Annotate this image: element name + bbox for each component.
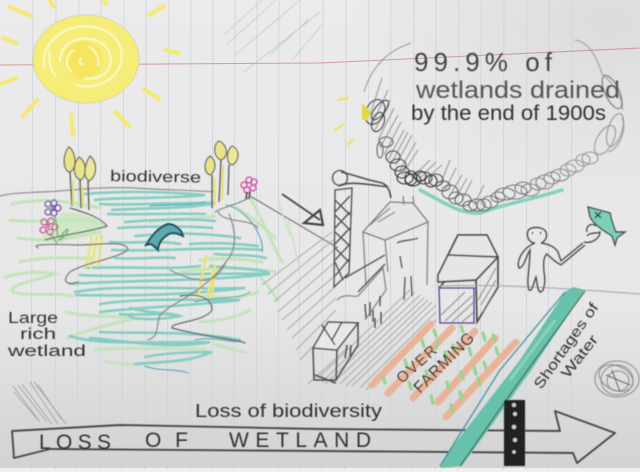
text: over: OVER [393, 342, 440, 387]
ground line [437, 285, 640, 294]
person [518, 227, 585, 292]
farm green sprouts [383, 326, 498, 412]
icon: flower right [241, 177, 257, 199]
arrow: loss of wetland timeline [12, 411, 615, 463]
yellow sun peeking behind cloud [334, 98, 371, 145]
wetland green marker strokes [5, 198, 282, 364]
net and fish [584, 224, 600, 242]
text: farming: FARMING [411, 330, 478, 397]
icon: factory building [337, 196, 428, 328]
wetland blue accents [145, 202, 262, 373]
farm orange rows [372, 324, 516, 417]
wetland teal marker strokes [70, 192, 270, 364]
text: large rich wetland [7, 310, 86, 360]
text: large rich wetland: rich [20, 326, 56, 343]
scribble ball [595, 360, 639, 397]
yellow reeds [86, 236, 215, 298]
island grass [40, 212, 107, 243]
icon: dam [504, 400, 525, 466]
teal water under cloud [420, 190, 562, 213]
icon: flowers left [40, 200, 68, 245]
panel: drained cloud [334, 40, 627, 213]
text: shortages of water: Shortages of [531, 299, 603, 392]
text: large rich wetland: Large [8, 310, 58, 327]
text: large rich wetland: wetland [7, 343, 86, 360]
industrial land hatching [262, 200, 436, 390]
scribble bottom left [13, 382, 66, 424]
icon: person holding dead fish [518, 207, 625, 292]
icon: river of water [440, 287, 585, 468]
text: loss of wetland: WETLAND [229, 429, 371, 452]
text: loss of wetland: OF [145, 429, 188, 452]
island bank outline [0, 188, 258, 343]
text: loss of wetland: LOSS [39, 431, 111, 454]
text: biodiverse: biodiverse [110, 168, 201, 187]
arrow: biodiversity pointer [250, 194, 338, 248]
text: cloud statistic [411, 47, 620, 125]
cloud scribble edge [361, 73, 627, 211]
cloud hatching [370, 78, 484, 205]
text: shortages of water: Water [559, 332, 602, 381]
icon: trees right [205, 141, 238, 208]
text: cloud statistic: wetlands drained [415, 77, 620, 104]
faint hatching top centre [224, 0, 322, 72]
text: loss of wetland [39, 429, 371, 454]
icon: jumping fish [146, 224, 183, 250]
text: cloud statistic: 99.9% of [414, 47, 553, 77]
cloud outline arcs [364, 40, 624, 152]
icon: sun [0, 0, 179, 135]
icon: barn [438, 235, 498, 323]
icon: small house [313, 322, 358, 383]
text: loss of biodiversity: Loss of biodiversity [195, 401, 382, 421]
panel: over farming [372, 324, 516, 417]
icon: trees left [64, 147, 96, 210]
text: cloud statistic: by the end of 1900s [411, 102, 606, 125]
icon: smokestack tower [332, 170, 391, 287]
text: shortages of water [531, 299, 603, 392]
panel: wetland [0, 188, 282, 373]
